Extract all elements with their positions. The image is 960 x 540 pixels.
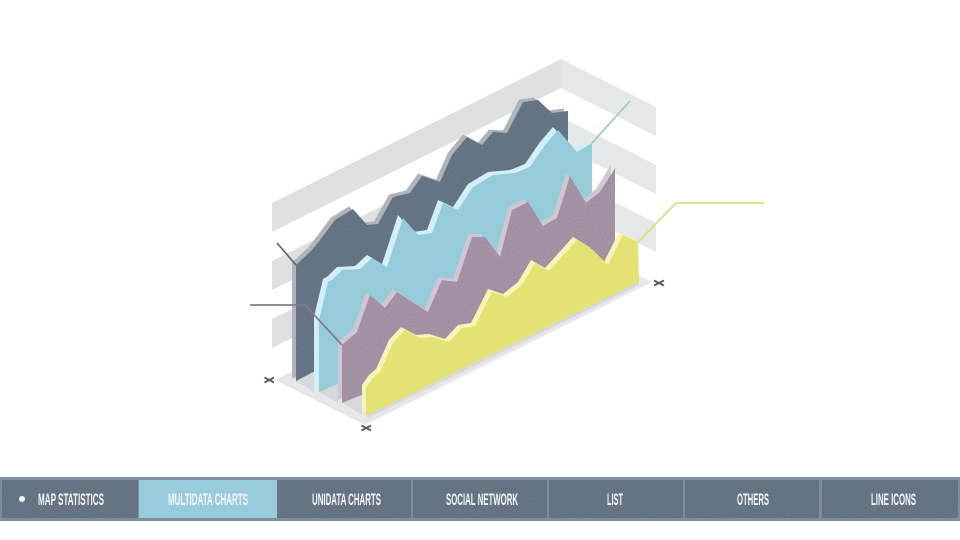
series: mauve area [338, 165, 615, 403]
back walls [272, 59, 656, 348]
nav item: others: OTHERS [737, 490, 769, 509]
series: slate area [292, 98, 568, 381]
nav item: list [549, 480, 683, 518]
nav item: map statistics: MAP STATISTICS [38, 490, 104, 509]
navigation bar [0, 477, 960, 521]
series: yellow area [362, 232, 639, 416]
nav item: unidata charts: UNIDATA CHARTS [312, 490, 381, 509]
nav item: line icons [822, 480, 958, 518]
floor shadows [296, 282, 639, 418]
leader line: blue [592, 101, 630, 143]
floor [275, 237, 652, 425]
nav item: unidata charts [277, 480, 411, 518]
cross marker: right [654, 280, 664, 286]
nav item: social network [413, 480, 547, 518]
nav item: map statistics [2, 480, 138, 518]
nav item: list: LIST [607, 490, 623, 509]
nav item: social network: SOCIAL NETWORK [446, 490, 518, 509]
cross marker: bottom [362, 426, 371, 430]
leader line: slate [277, 243, 296, 265]
nav item: multidata charts (active): MULTIDATA CHARTS [168, 490, 248, 509]
nav item: others [685, 480, 819, 518]
nav item: multidata charts (active) [139, 480, 277, 518]
cross marker: left [264, 378, 274, 382]
series: blue area [314, 127, 592, 392]
leader line: mauve [250, 305, 342, 345]
isometric chart [250, 59, 764, 430]
leader line: yellow [638, 203, 764, 242]
